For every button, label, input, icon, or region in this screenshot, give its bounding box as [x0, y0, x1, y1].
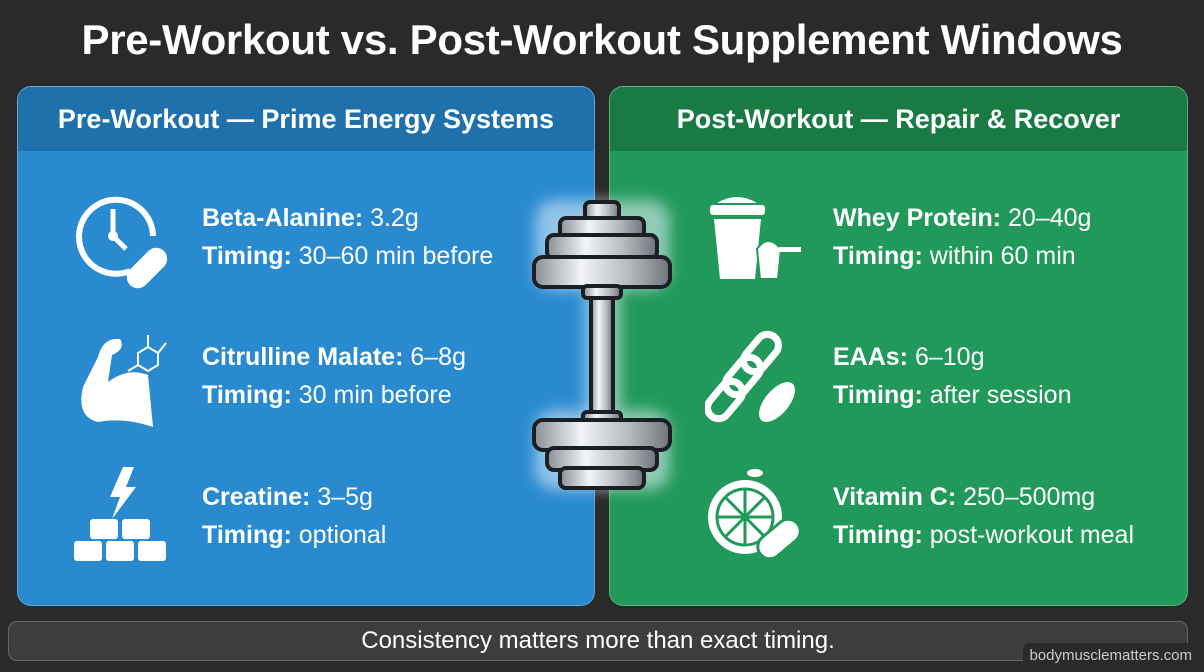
text: beta-alanine: Timing: 30–60 min before [202, 242, 493, 270]
text: citrulline malate [202, 343, 466, 409]
text: creatine: Creatine: 3–5g [202, 483, 373, 511]
watermark [1023, 643, 1198, 668]
text: beta-alanine [202, 204, 493, 270]
icon: muscle and molecule [81, 335, 167, 427]
icon: citrus and pill [708, 469, 799, 558]
icon: dumbbell [526, 190, 680, 500]
text: vitamin C [833, 483, 1134, 549]
text: whey protein [833, 204, 1091, 270]
text: beta-alanine: Beta-Alanine: 3.2g [202, 204, 419, 232]
icon: creatine blocks [74, 467, 166, 561]
text: EAAs: Timing: after session [833, 381, 1072, 409]
text: vitamin C: Timing: post-workout meal [833, 521, 1134, 549]
panel: post-workout [609, 86, 1188, 606]
icon: clock and pill [76, 196, 168, 288]
panel: pre-workout [17, 86, 595, 606]
heading: pre-workout [18, 87, 594, 151]
text: EAAs: EAAs: 6–10g [833, 343, 984, 371]
text: whey protein: Timing: within 60 min [833, 242, 1076, 270]
text: whey protein: Whey Protein: 20–40g [833, 204, 1091, 232]
heading: post-workout: Post-Workout — Repair & Recover [677, 104, 1120, 134]
footer callout [8, 621, 1188, 661]
text: citrulline malate: Citrulline Malate: 6–8g [202, 343, 466, 371]
text: creatine: Timing: optional [202, 521, 386, 549]
icon: chain and muscle fiber [705, 330, 795, 422]
text: EAAs [833, 343, 1072, 409]
icon: shaker and scoop [710, 197, 801, 279]
watermark: bodymusclematters.com [1029, 647, 1192, 664]
text: vitamin C: Vitamin C: 250–500mg [833, 483, 1095, 511]
heading: post-workout [610, 87, 1187, 151]
text: creatine [202, 483, 386, 549]
footer callout: Consistency matters more than exact timing. [361, 627, 835, 654]
title: Pre-Workout vs. Post-Workout Supplement Windows [81, 16, 1123, 63]
heading: pre-workout: Pre-Workout — Prime Energy Systems [58, 104, 554, 134]
text: citrulline malate: Timing: 30 min before [202, 381, 452, 409]
